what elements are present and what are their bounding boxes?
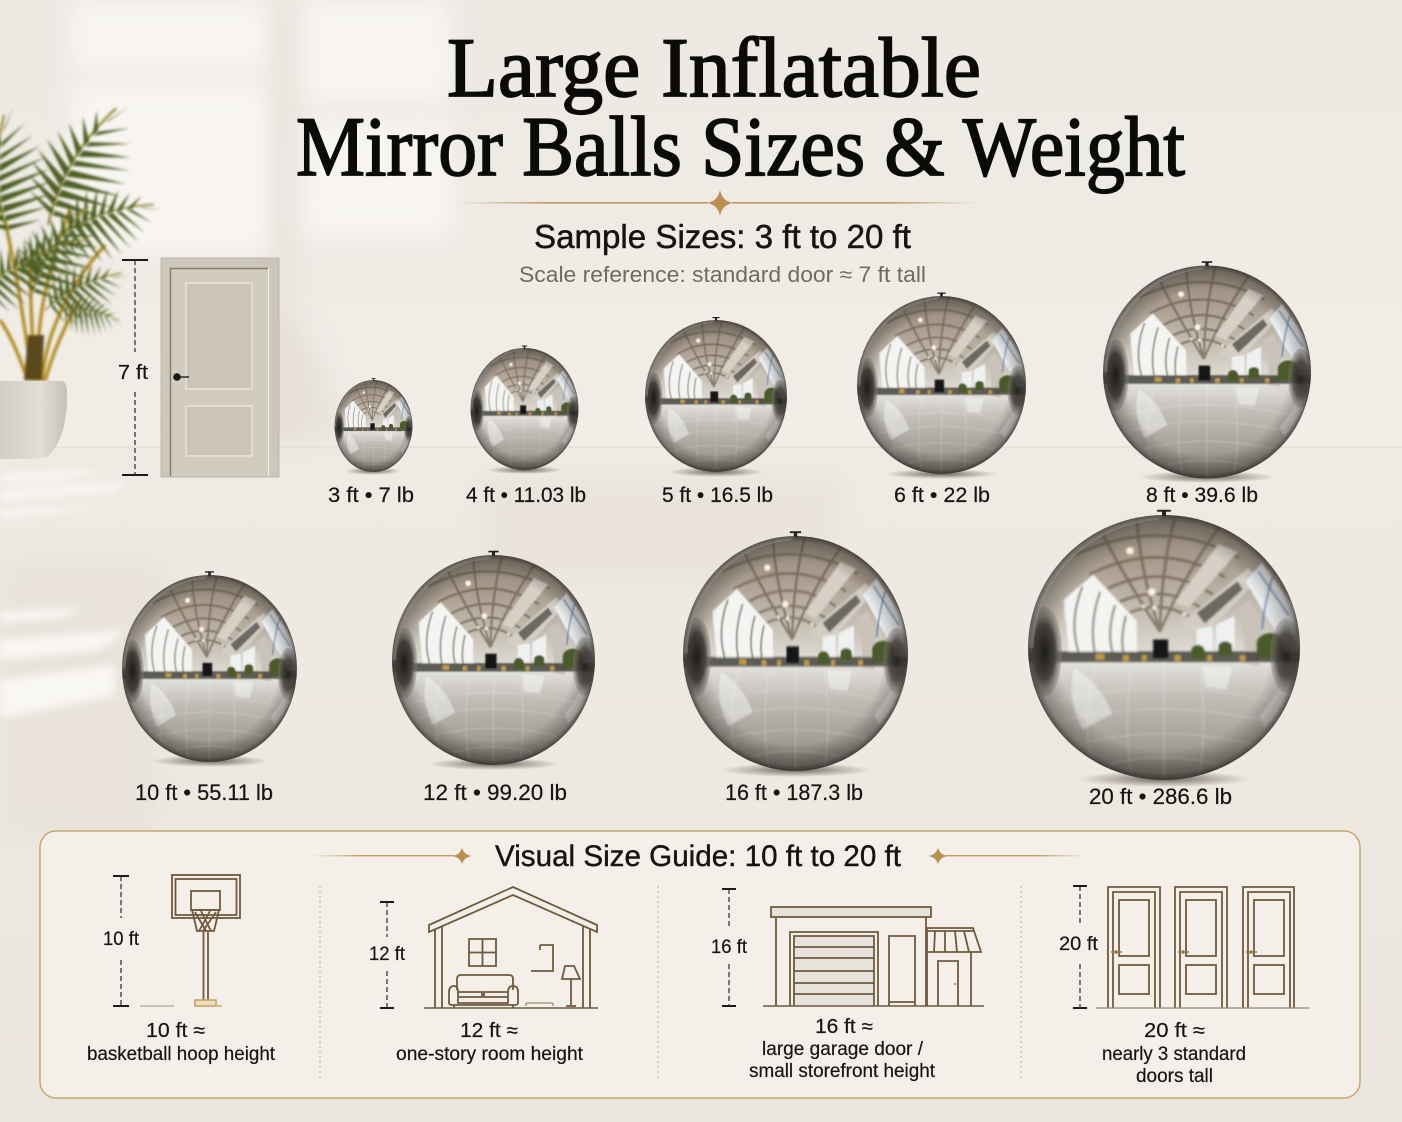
label: 6 ft: 6 ft • 22 lb [894, 484, 990, 507]
label: 20 ft: 20 ft • 286.6 lb [1089, 784, 1232, 809]
icon: basketball hoop [140, 875, 240, 1006]
plant pot [0, 381, 67, 459]
caption: garage and storefront: small storefront height [749, 1061, 936, 1082]
scale reference note: Scale reference: standard door ≈ 7 ft tall [519, 262, 926, 287]
measure: 12 ft [369, 902, 406, 1008]
door height measure [118, 260, 148, 475]
label: 12 ft: 12 ft • 99.20 lb [423, 780, 567, 805]
label: 5 ft: 5 ft • 16.5 lb [662, 484, 773, 507]
measure: 20 ft: 20 ft [1059, 934, 1099, 955]
heading ornaments [312, 847, 1086, 865]
guide: garage and storefront [711, 889, 984, 1082]
measure: 20 ft [1059, 886, 1099, 1008]
ball: 8 ft [1102, 261, 1313, 478]
door 2 [1175, 887, 1227, 1008]
door scale reference [161, 258, 279, 477]
ball: 3 ft [334, 378, 413, 472]
label: 16 ft: 16 ft • 187.3 lb [725, 780, 863, 805]
ball: 4 ft [470, 346, 580, 470]
ball: 6 ft [856, 292, 1028, 474]
measure: 16 ft: 16 ft [711, 937, 748, 958]
icon: house with room [424, 887, 598, 1008]
ball: 12 ft [391, 551, 597, 765]
guide: basketball hoop [87, 875, 276, 1065]
subtitle: Sample Sizes: 3 ft to 20 ft [534, 218, 911, 255]
caption: basketball hoop: 10 ft ≈ [146, 1020, 205, 1042]
label: 10 ft: 10 ft • 55.11 lb [135, 780, 273, 805]
caption: garage and storefront [749, 1016, 936, 1082]
measure: 12 ft: 12 ft [369, 944, 406, 965]
door 1 [1108, 887, 1160, 1008]
caption: one-story room: one-story room height [396, 1044, 584, 1065]
caption: garage and storefront: 16 ft ≈ [815, 1016, 873, 1038]
icon: garage and storefront [763, 907, 984, 1006]
label: 8 ft: 8 ft • 39.6 lb [1146, 484, 1258, 507]
title divider with gold star [458, 190, 978, 216]
guide: one-story room [369, 887, 598, 1065]
measure: 10 ft: 10 ft [103, 929, 140, 950]
ball shadows [152, 466, 1275, 787]
label: 3 ft: 3 ft • 7 lb [328, 484, 414, 507]
ball: 5 ft [644, 317, 788, 472]
caption: three doors: 20 ft ≈ [1144, 1020, 1205, 1042]
caption: basketball hoop: basketball hoop height [87, 1044, 276, 1065]
ball: 10 ft [121, 571, 299, 762]
caption: three doors: doors tall [1136, 1066, 1213, 1087]
title: Mirror Balls Sizes & Weight [296, 100, 1185, 194]
guide: three standard doors [1059, 886, 1309, 1087]
icon: three doors [1096, 887, 1309, 1008]
caption: basketball hoop [87, 1020, 276, 1065]
caption: garage and storefront: large garage door / [762, 1039, 924, 1060]
title: Large Inflatable [447, 21, 981, 115]
panel heading: Visual Size Guide: 10 ft to 20 ft [495, 840, 902, 873]
caption: three doors: nearly 3 standard [1102, 1044, 1246, 1065]
caption: one-story room [396, 1020, 584, 1065]
label: 4 ft: 4 ft • 11.03 lb [466, 484, 586, 507]
plant: palm in stone pot [0, 78, 173, 459]
door height measure: 7 ft [118, 362, 148, 384]
door frame [161, 258, 279, 477]
panel: visual size guide [40, 831, 1360, 1098]
door 3 [1243, 887, 1294, 1008]
ball: 20 ft [1027, 510, 1303, 780]
measure: 10 ft [103, 876, 140, 1006]
title [296, 21, 1185, 194]
caption: three doors [1102, 1020, 1246, 1087]
measure: 16 ft [711, 889, 748, 1006]
caption: one-story room: 12 ft ≈ [460, 1020, 518, 1042]
door leaf [170, 268, 269, 476]
ball: 16 ft [682, 531, 910, 771]
